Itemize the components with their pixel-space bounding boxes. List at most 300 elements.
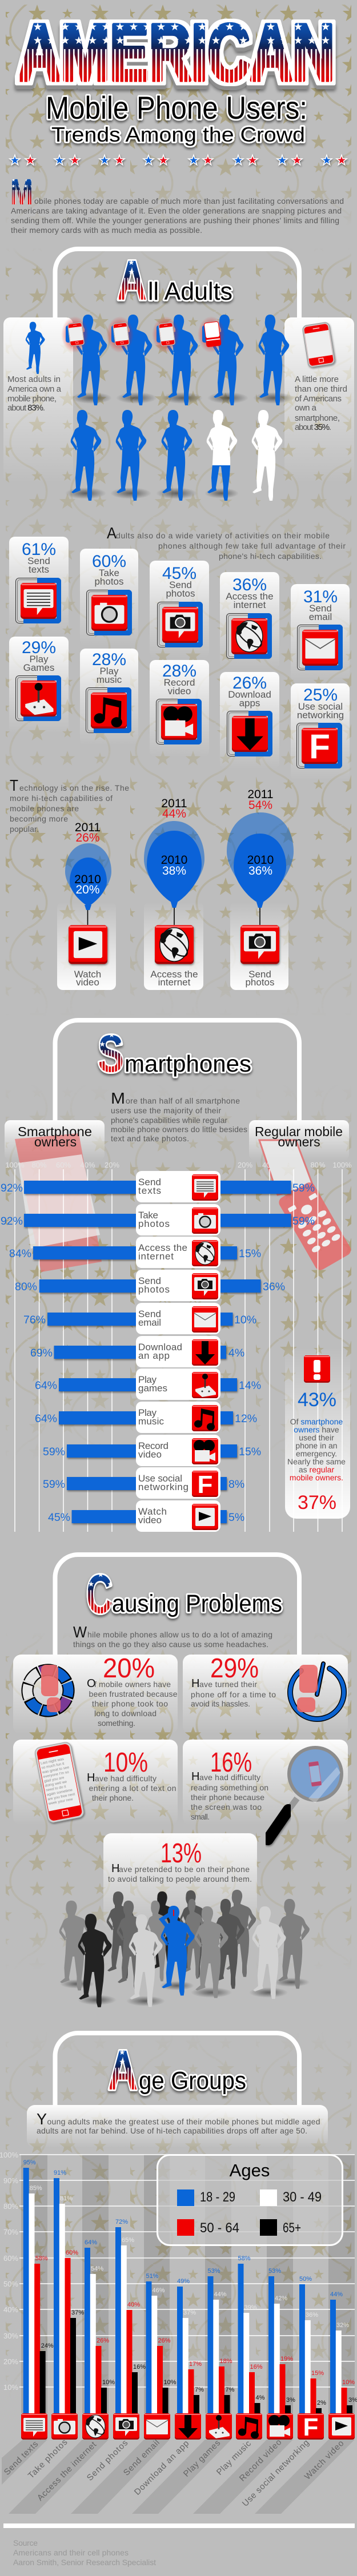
icon: phone with text message: glad you are: [44, 1776, 65, 1784]
section frame: [55, 249, 299, 318]
column: download an app: 37%: [183, 2309, 196, 2316]
text: technology on the rise: popular.: [10, 824, 39, 834]
card: send photos: [150, 561, 209, 658]
row: download an app: [30, 1336, 244, 1367]
icon: phone with text message: again sometime: [46, 1788, 73, 1797]
balloon: watch video: [57, 821, 116, 990]
activity cards row 2: [9, 637, 350, 780]
column: play music: 16%: [250, 2364, 263, 2370]
balloon: send photos: photos: [245, 977, 275, 988]
card: slow downloads: f mobile owners have: [94, 1680, 171, 1689]
star divider: [10, 155, 347, 165]
balloon: access the internet: 2011: [161, 797, 187, 810]
card: difficulty entering text: H: [87, 1772, 95, 1784]
row: send texts: texts: [138, 1185, 161, 1196]
column: record video: 3%: [286, 2397, 295, 2404]
text: adults activities: dults also do a wide variety of activities on their mobile: [116, 531, 330, 540]
column: record video: [268, 2268, 295, 2413]
rotated activity labels: Record video: [238, 2437, 283, 2484]
intro text: sending them off. While the younger generations are pushing their phones' limits and filling: [11, 216, 339, 225]
column: take photos: 81%: [60, 2195, 73, 2202]
row: access the internet: [9, 1237, 261, 1268]
card: access the internet: Access the: [226, 591, 274, 602]
intro text: [11, 196, 344, 235]
panel: age groups: [27, 2033, 328, 2148]
text: adults activities: [107, 524, 346, 561]
card: difficulty entering text: entering a lot of text on: [89, 1784, 176, 1793]
section frame: [55, 1555, 299, 1655]
balloon: access the internet: [144, 797, 204, 990]
column: download an app: 49%: [177, 2278, 190, 2285]
callout: emergency use: as regular: [299, 1465, 334, 1474]
icon: phone with text message: everyone I'm so: [43, 1770, 70, 1779]
chart axes: 40%: [262, 1161, 277, 1169]
column: play games: [208, 2268, 235, 2413]
column: record video: 19%: [280, 2356, 293, 2362]
balloon: watch video: Watch: [74, 969, 101, 980]
column: take photos: 60%: [66, 2249, 78, 2256]
row: download an app: 4%: [228, 1347, 244, 1359]
legend: ages: 18 - 29: [200, 2189, 235, 2205]
subtitle line 1: Mobile Phone Users:: [46, 90, 307, 126]
balloon: watch video: 20%: [75, 883, 100, 896]
icon: faded flip phone: [259, 1140, 353, 1272]
card: difficulty entering text: ave had difficulty: [95, 1774, 157, 1783]
card: difficulty reading: [183, 1740, 348, 1825]
card: turned phone off: phone off for a time to: [191, 1690, 276, 1699]
icon: phone with text message: need to do it: [46, 1785, 66, 1793]
row: take photos: photos: [138, 1218, 170, 1229]
card: record video: Record: [164, 677, 195, 688]
row: download an app: an app: [138, 1350, 170, 1361]
column: take photos: 37%: [71, 2309, 84, 2316]
heading: Smartphones: S: [98, 1025, 124, 1083]
card: difficulty reading: H: [191, 1770, 199, 1783]
side card: mobile phone ownership: [3, 317, 73, 483]
side card: smartphone ownership: smartphone,: [295, 413, 340, 423]
footer divider: [3, 2523, 355, 2528]
card: download apps: [220, 672, 279, 769]
balloon: access the internet: 44%: [162, 807, 186, 820]
card: slow downloads: something.: [98, 1718, 135, 1728]
card: record video: 28%: [162, 662, 196, 681]
card: difficulty reading: their phone because: [191, 1793, 264, 1802]
column: use social networking: 15%: [311, 2370, 324, 2377]
side card: smartphone ownership: than one third: [295, 384, 347, 394]
text card: age groups intro: oung adults make the greatest use of their mobile phones but middle aged: [47, 2117, 320, 2126]
rotated activity labels: Access the internet: [35, 2440, 99, 2503]
side card: smartphone ownership: own a: [295, 403, 317, 413]
icon: phone with text message: Last night was: [40, 1757, 65, 1766]
rotated activity labels: Take photos: [26, 2437, 69, 2481]
legend: ages: 30 - 49: [283, 2189, 322, 2205]
people grid row 2: [65, 410, 282, 501]
row: take photos: [1, 1204, 315, 1235]
panel: smartphones: [5, 1020, 353, 1272]
card: play music: [80, 649, 138, 746]
y axis grid: 20%: [3, 2357, 18, 2366]
y axis grid: 70%: [3, 2228, 18, 2236]
balloon: send photos: 2010: [247, 854, 274, 867]
row: send texts: Send: [138, 1177, 161, 1188]
row: access the internet: Access the: [138, 1242, 187, 1253]
rotated activity labels: Send texts: [2, 2439, 40, 2477]
row: send email: 10%: [234, 1314, 256, 1326]
callout: emergency use: Nearly the same: [287, 1457, 346, 1466]
row: use social networking: networking: [138, 1482, 188, 1492]
balloon: send photos: Send: [248, 969, 271, 980]
text card: age groups intro: adults are not far behind. Use of hi-tech capabilities drops off after age 50.: [37, 2126, 307, 2135]
row: record video: video: [138, 1449, 162, 1460]
balloon: send photos: 36%: [248, 864, 272, 878]
row: play games: 64%: [35, 1379, 57, 1392]
subtitle line 2: Trends Among the Crowd: [51, 123, 305, 146]
icon: loading wheel: [21, 1664, 75, 1717]
row: record video: Record: [138, 1440, 169, 1451]
phones held by people: [61, 316, 225, 353]
callout: emergency use: [285, 1347, 350, 1519]
card: slow downloads: O: [87, 1677, 96, 1690]
column: watch video: [330, 2291, 357, 2413]
balloon: access the internet: 2010: [161, 854, 187, 867]
section frame: [55, 1020, 299, 1120]
icon: phone with text message: was great to see: [42, 1765, 70, 1775]
column: send photos: 16%: [133, 2364, 146, 2370]
card: play games: Games: [23, 662, 54, 673]
balloon: watch video: 2011: [75, 821, 101, 834]
balloon: watch video: 26%: [75, 831, 100, 844]
column: record video: 42%: [275, 2295, 287, 2302]
column: send email: 51%: [146, 2273, 159, 2280]
row: play music: [35, 1402, 257, 1433]
card: difficulty entering text: [13, 1740, 178, 1825]
y axis grid: 50%: [3, 2280, 18, 2288]
column header: regular mobile owners: [249, 1120, 353, 1272]
card: access the internet: 36%: [232, 575, 267, 594]
column bands: [21, 2155, 355, 2413]
column header: regular mobile owners: Regular mobile: [255, 1124, 343, 1139]
column: take photos: [54, 2170, 84, 2413]
card: download apps: 26%: [232, 674, 267, 693]
card: download apps: apps: [239, 698, 260, 709]
card: use social networking: Use social: [298, 701, 343, 712]
column header: smartphone owners: Smartphone: [18, 1124, 92, 1139]
panel: causing problems: [13, 1555, 354, 2007]
card: play music: music: [97, 674, 122, 685]
text: technology on the rise: T: [10, 776, 18, 794]
text: adults activities: phone's hi-tech capabilities.: [219, 552, 322, 561]
column: send email: 10%: [163, 2379, 177, 2386]
person on phone: [161, 1906, 195, 1995]
row: play games: Play: [138, 1374, 157, 1385]
balloon: watch video: video: [76, 977, 99, 988]
crowd of people: [59, 1890, 310, 2007]
text: smartphone intro: users use the majority of their: [111, 1106, 221, 1115]
row: use social networking: 8%: [228, 1478, 244, 1491]
column: access the internet: 54%: [91, 2265, 103, 2272]
column: play music: [238, 2255, 265, 2413]
column header: regular mobile owners: owners: [278, 1134, 320, 1149]
column: send texts: 85%: [30, 2185, 42, 2192]
icon: phone with text message: week your new: [47, 1797, 73, 1806]
card: use social networking: [291, 683, 350, 780]
row: download an app: Download: [138, 1342, 182, 1353]
section frame: [55, 2033, 299, 2105]
row: send photos: Send: [138, 1275, 161, 1286]
icon: exclamation button: [304, 1355, 330, 1383]
rotated activity labels: Send photos: [85, 2438, 130, 2483]
icon: pink exclamation: [41, 1665, 61, 1712]
heading: Age Groups: A: [108, 2039, 138, 2102]
text: smartphone intro: ore than half of all smartphone: [126, 1096, 240, 1105]
row: watch video: Watch: [138, 1506, 167, 1517]
y axis grid: [0, 2151, 355, 2392]
column: access the internet: [85, 2239, 115, 2413]
card: record video: video: [168, 686, 191, 697]
row: play games: 14%: [239, 1379, 261, 1392]
crowd shadows: [60, 1978, 310, 2006]
row: send texts: 59%: [292, 1182, 315, 1194]
card: difficulty reading: the screen was too: [191, 1802, 262, 1812]
y axis grid: 80%: [3, 2202, 18, 2211]
column: access the internet: 10%: [102, 2379, 115, 2386]
row: send email: email: [138, 1317, 161, 1328]
heading: All Adults: A: [117, 249, 147, 312]
text: technology on the rise: echnology is on the rise. The: [19, 783, 129, 792]
icon: power symbol: [280, 1656, 354, 1729]
chart axes: 100%: [5, 1161, 25, 1169]
card: turned phone off: ave turned their: [199, 1680, 257, 1689]
panel: all adults: [3, 249, 354, 501]
column: send texts: [23, 2159, 54, 2413]
icon: phone with text message: doing well we: [45, 1780, 67, 1788]
column: send photos: 72%: [115, 2219, 128, 2225]
rotated activity labels: Use social networking: [240, 2438, 311, 2509]
diagonal label bands: [2, 2440, 355, 2514]
bar chart: use by age group: [0, 2151, 357, 2514]
icon: magnifying glass: [268, 1748, 342, 1840]
row: watch video: video: [138, 1515, 162, 1526]
activity cards row 1: [9, 537, 350, 681]
y axis grid: 60%: [3, 2254, 18, 2263]
y axis grid: 10%: [3, 2383, 18, 2392]
column: use social networking: [299, 2276, 326, 2413]
rotated activity labels: Send email: [122, 2438, 162, 2478]
row: send photos: photos: [138, 1284, 170, 1295]
callout: emergency use: phone in an: [295, 1441, 338, 1450]
rotated activity labels: Watch video: [303, 2438, 346, 2482]
row: send email: Send: [138, 1309, 161, 1319]
column: send texts: 24%: [41, 2342, 54, 2349]
chart axes: 20%: [238, 1161, 252, 1169]
column: send email: 46%: [152, 2287, 165, 2294]
legend: ages: 65+: [283, 2220, 301, 2236]
column: download an app: 7%: [195, 2386, 204, 2393]
chart axes: 80%: [32, 1161, 47, 1169]
text: technology on the rise: more hi-tech capabilities of: [10, 794, 113, 803]
column: play games: 7%: [225, 2386, 235, 2393]
text: technology on the rise: mobile phones are: [10, 804, 79, 813]
heading: Smartphones: [98, 1025, 251, 1083]
text: technology on the rise: becoming more: [10, 814, 68, 823]
intro text: Americans are taking advantage of it. Even the older generations are snapping pictures and: [11, 206, 342, 215]
card: send photos: photos: [166, 588, 195, 599]
text: adults activities: phones although few take full advantage of their: [158, 541, 346, 550]
card: difficulty reading: 16%: [210, 1748, 252, 1778]
card: play games: Play: [29, 654, 49, 665]
column: download an app: 17%: [189, 2361, 202, 2368]
card: send texts: 61%: [22, 540, 56, 559]
balloon chart: [57, 788, 294, 990]
legend: ages: 50 - 64: [200, 2220, 239, 2236]
heading: Causing Problems: [86, 1564, 282, 1625]
column: watch video: 10%: [342, 2379, 355, 2386]
chart axes: 60%: [56, 1161, 71, 1169]
row: send photos: 36%: [263, 1281, 285, 1293]
row: play music: Play: [138, 1407, 157, 1418]
callout: emergency use: used their: [299, 1433, 334, 1442]
row: record video: 15%: [239, 1446, 261, 1458]
card: take photos: photos: [94, 576, 124, 587]
y axis grid: 30%: [3, 2332, 18, 2340]
column: play games: 53%: [208, 2268, 220, 2275]
row: watch video: 45%: [48, 1511, 70, 1524]
text: technology on the rise: [10, 776, 129, 834]
card: send email: email: [309, 611, 332, 622]
column: access the internet: 26%: [97, 2337, 109, 2344]
callout: emergency use: 43%: [298, 1389, 336, 1411]
legend: ages: Ages: [230, 2160, 270, 2180]
row: record video: [43, 1435, 261, 1466]
card: send email: 31%: [303, 587, 338, 606]
card: slow downloads: long to download: [94, 1709, 157, 1718]
balloon: send photos: [227, 788, 294, 990]
text: problems intro: things on the go they also cause us some headaches.: [73, 1640, 268, 1649]
card: send photos: Send: [169, 579, 192, 590]
drop cap M: M: [10, 171, 33, 212]
column: take photos: 91%: [54, 2170, 66, 2176]
balloon: access the internet: Access the: [150, 969, 198, 980]
side card: smartphone ownership: [284, 317, 354, 483]
callout: emergency use: mobile owners.: [290, 1473, 343, 1482]
heading: All Adults: [117, 249, 232, 312]
column: play music: 4%: [256, 2394, 265, 2401]
card: access the internet: internet: [234, 599, 266, 610]
row: watch video: 5%: [228, 1511, 244, 1524]
side card: mobile phone ownership: Most adults in: [7, 375, 61, 384]
title: [18, 7, 335, 146]
row: access the internet: 15%: [239, 1247, 261, 1260]
card: difficulty reading: reading something on: [191, 1783, 268, 1792]
card: pretending to be on phone: [103, 1833, 257, 1930]
column: play music: 58%: [238, 2255, 251, 2262]
rotated activity labels: Play games: [182, 2438, 222, 2479]
callout: emergency use: owners have: [294, 1425, 339, 1434]
chart icons: [21, 2413, 355, 2441]
heading: Causing Problems: ausing Problems: [112, 1590, 282, 1617]
text: adults activities: A: [107, 524, 117, 542]
icon: pink exclamation: [297, 1665, 318, 1712]
column header: smartphone owners: [5, 1120, 105, 1272]
column: send photos: [115, 2219, 146, 2413]
row: take photos: 59%: [292, 1215, 315, 1227]
card: send photos: 45%: [162, 564, 196, 583]
card: play games: 29%: [22, 638, 56, 657]
legend: ages: [158, 2155, 343, 2245]
column: use social networking: 50%: [299, 2276, 312, 2283]
intro text: their memory cards with as much media as possible.: [11, 226, 202, 235]
card: turned phone off: H: [191, 1677, 199, 1690]
column: use social networking: 2%: [317, 2400, 326, 2406]
card: play games: [9, 637, 69, 734]
source credits: Aaron Smith, Senior Research Specialist: [13, 2558, 156, 2567]
card: access the internet: [220, 572, 279, 669]
card: take photos: [80, 549, 138, 646]
card: send texts: Send: [27, 556, 50, 566]
card: turned phone off: [183, 1653, 354, 1734]
row: use social networking: Use social: [138, 1473, 182, 1484]
column: watch video: 44%: [330, 2291, 343, 2298]
source credits: [13, 2538, 156, 2567]
card: pretending to be on phone: to avoid talking to people around them.: [108, 1874, 252, 1883]
column: record video: 53%: [268, 2268, 281, 2275]
callout: emergency use: 37%: [298, 1492, 336, 1514]
heading: Smartphones: martphones: [125, 1050, 251, 1077]
card: pretending to be on phone: H: [111, 1862, 119, 1875]
comparison chart: smartphone vs regular owners: [1, 1161, 352, 1532]
column header: smartphone owners: owners: [34, 1134, 77, 1149]
row: take photos: Take: [138, 1210, 158, 1221]
row: use social networking: [43, 1467, 244, 1499]
card: slow downloads: 20%: [103, 1653, 155, 1684]
card: send texts: texts: [29, 564, 49, 575]
card: play music: Play: [99, 666, 119, 677]
card: send email: [291, 584, 350, 681]
icon: faded smartphone: [15, 1133, 102, 1272]
intro paragraph: [10, 171, 344, 235]
text: problems intro: [73, 1623, 272, 1649]
card: slow downloads: been frustrated because: [89, 1689, 178, 1698]
column: play games: 18%: [219, 2358, 232, 2365]
card: play music: 28%: [92, 650, 126, 669]
heading: All Adults: ll Adults: [148, 277, 232, 305]
chart axes: 60%: [286, 1161, 301, 1169]
side card: smartphone ownership: A little more: [295, 375, 339, 384]
row: watch video: [48, 1500, 244, 1532]
card: difficulty entering text: their phone.: [92, 1793, 134, 1802]
text card: age groups intro: Y: [37, 2110, 47, 2128]
row: send texts: [1, 1171, 315, 1202]
card: send texts: [9, 537, 69, 634]
icon: phone with text message: [34, 1741, 85, 1824]
intro text: obile phones today are capable of much more than just facilitating conversations and: [34, 196, 344, 206]
column: watch video: 32%: [336, 2322, 349, 2329]
side card: smartphone ownership: about 35%.: [295, 422, 331, 432]
column: play games: 44%: [214, 2291, 227, 2298]
row: access the internet: 84%: [9, 1247, 31, 1260]
people grid row 1: [71, 315, 294, 405]
row: send photos: [15, 1270, 285, 1301]
row: play music: 12%: [235, 1412, 257, 1425]
source credits: Source: [13, 2538, 38, 2547]
column: send email: [146, 2273, 177, 2413]
heading: Age Groups: ge Groups: [139, 2067, 246, 2095]
chart axes: 100%: [332, 1161, 352, 1169]
row: play music: 64%: [35, 1412, 57, 1425]
card: use social networking: networking: [297, 710, 344, 721]
rotated activity labels: [2, 2437, 346, 2509]
card: turned phone off: 29%: [210, 1653, 259, 1684]
